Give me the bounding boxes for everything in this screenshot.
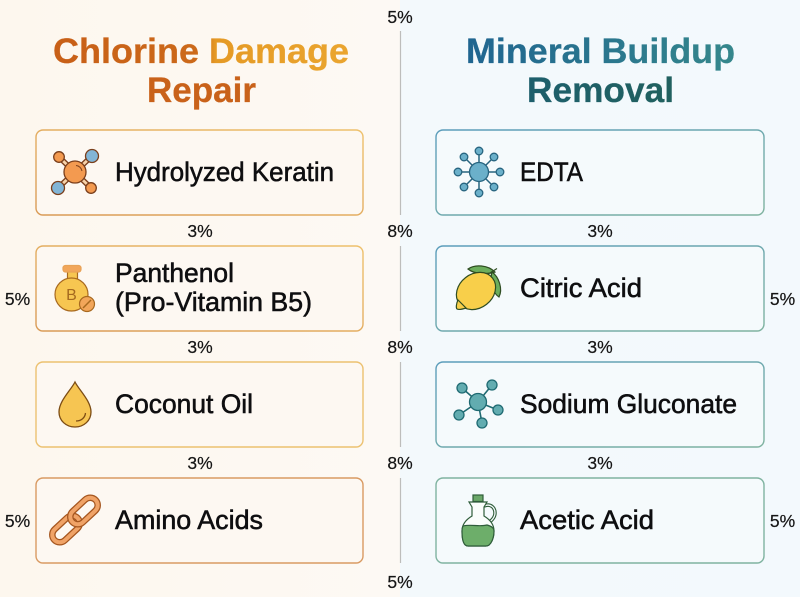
label: Acetic Acid: [520, 505, 654, 535]
spacing labels: vertical gaps: 3%: [587, 221, 613, 241]
icon: gluconate molecule: [454, 380, 503, 428]
center divider with percentage spacing: 8%: [387, 453, 413, 473]
center divider with percentage spacing: 5%: [387, 572, 413, 592]
label: Panthenol: [115, 258, 234, 288]
center divider with percentage spacing: 8%: [387, 221, 413, 241]
heading: Mineral Buildup Removal: [466, 32, 735, 110]
label: Sodium Gluconate: [520, 389, 737, 419]
label: Amino Acids: [115, 505, 263, 535]
icon: vitamin B5 flask: B: [66, 287, 77, 304]
center divider with percentage spacing: [387, 7, 413, 592]
icon: vinegar jug: [462, 495, 495, 546]
spacing labels: side margins: 5%: [5, 289, 30, 309]
panel: Sodium Gluconate: [436, 362, 764, 447]
label: EDTA: [520, 157, 583, 187]
heading: Mineral Buildup Removal: Mineral Buildup: [466, 32, 735, 71]
center divider with percentage spacing: 8%: [387, 337, 413, 357]
panel: EDTA: [436, 130, 764, 215]
spacing labels: vertical gaps: 3%: [187, 221, 213, 241]
spacing labels: vertical gaps: 3%: [587, 453, 613, 473]
icon: chain link: [49, 495, 101, 545]
spacing labels: side margins: 5%: [5, 511, 30, 531]
heading: Chlorine Damage Repair: Chlorine Damage: [53, 32, 349, 71]
spacing labels: vertical gaps: [187, 221, 613, 473]
panel: Acetic Acid: [436, 478, 764, 563]
panel: Hydrolyzed Keratin: [36, 130, 363, 215]
heading: Mineral Buildup Removal: Removal: [527, 71, 674, 110]
label: Hydrolyzed Keratin: [115, 157, 334, 187]
icon: lemon: [449, 265, 503, 317]
panel: Coconut Oil: [36, 362, 363, 447]
panel: Citric Acid: [436, 246, 764, 331]
label: Citric Acid: [520, 273, 642, 303]
icon: vitamin B5 flask: [55, 266, 94, 312]
spacing labels: side margins: [5, 289, 795, 531]
spacing labels: side margins: 5%: [770, 289, 795, 309]
spacing labels: vertical gaps: 3%: [587, 337, 613, 357]
center divider with percentage spacing: 5%: [387, 7, 413, 27]
spacing labels: vertical gaps: 3%: [187, 337, 213, 357]
panel: Amino Acids: [36, 478, 363, 563]
panel: Panthenol: (Pro-Vitamin B5): [115, 287, 312, 317]
panel: Panthenol: [36, 246, 363, 331]
icon: keratin molecule: [52, 150, 98, 194]
heading: Chlorine Damage Repair: [53, 32, 349, 110]
heading: Chlorine Damage Repair: Repair: [147, 71, 256, 110]
icon: oil drop: [59, 382, 91, 427]
icon: EDTA chelate: [454, 147, 504, 197]
spacing labels: vertical gaps: 3%: [187, 453, 213, 473]
label: Coconut Oil: [115, 389, 253, 419]
spacing labels: side margins: 5%: [770, 511, 795, 531]
